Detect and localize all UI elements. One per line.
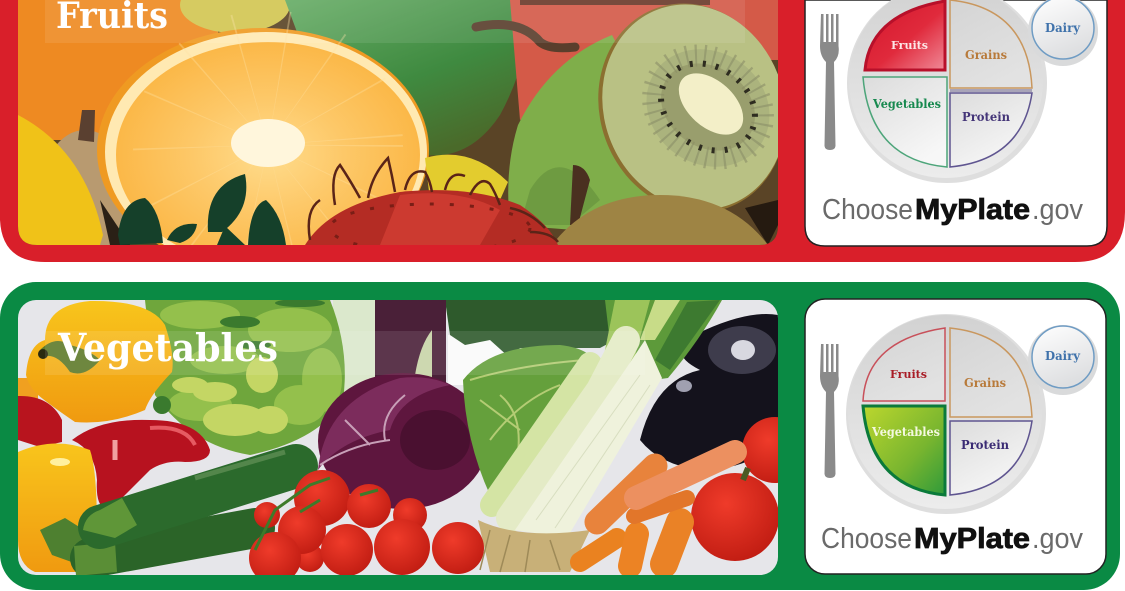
kiwi slice (598, 4, 778, 209)
eggplant (640, 314, 778, 470)
vegetables label: Vegetables (872, 97, 941, 111)
zucchini lower (40, 518, 255, 576)
tomato calyx (743, 468, 748, 480)
fruits title band (45, 0, 745, 43)
MyPlate graphic: vegetables highlighted (820, 314, 1098, 514)
leek roots (478, 520, 590, 572)
plate (847, 0, 1047, 183)
brown kiwi (552, 195, 768, 245)
logo text: .gov (1032, 523, 1083, 555)
logo text: Choose (821, 523, 912, 555)
grains label: Grains (965, 48, 1007, 62)
white plate card (805, 299, 1106, 574)
dairy cup: Dairy (1045, 349, 1081, 363)
red pepper (72, 420, 210, 510)
plate (846, 314, 1046, 514)
red small pepper (18, 396, 62, 447)
panel: vegetables (0, 282, 1120, 590)
red panel frame (0, 0, 1125, 262)
segment: grains (950, 328, 1032, 417)
segment: protein (950, 93, 1032, 167)
grains label: Grains (964, 376, 1006, 390)
orange slice (97, 28, 429, 272)
logo text: MyPlate (915, 194, 1030, 226)
icon: fork (820, 14, 839, 150)
tomatoes (249, 417, 778, 575)
logo text (822, 194, 1083, 226)
segment: fruits (865, 1, 945, 70)
leeks (492, 300, 722, 538)
green pear (508, 35, 650, 232)
zucchini upper (83, 452, 296, 538)
savoy cabbage (463, 345, 592, 495)
MyPlate graphic: fruits highlighted (820, 0, 1098, 183)
logo text: .gov (1032, 194, 1083, 226)
dairy cup: Dairy (1045, 21, 1081, 35)
segment: protein (950, 421, 1032, 495)
logo text: Choose (822, 194, 913, 226)
dairy cup (1028, 325, 1098, 395)
fruits label: Fruits (891, 38, 928, 52)
rambutan (305, 158, 558, 252)
carrots (580, 452, 735, 566)
vegetable photograph (18, 299, 808, 584)
fruit photograph (18, 0, 778, 245)
broccoli backdrop (446, 300, 609, 353)
band between grains and protein (950, 89, 1032, 92)
yellow pepper bottom (18, 443, 97, 572)
segment: grains (950, 0, 1032, 88)
segment: vegetables (863, 406, 945, 495)
protein label: Protein (962, 110, 1010, 124)
tomato stems (255, 478, 378, 550)
heading: Vegetables: Vegetables (57, 325, 278, 370)
white plate card (805, 0, 1107, 246)
yellow pepper top (26, 301, 173, 422)
fruits label: Fruits (890, 367, 927, 381)
vegetables label: Vegetables (871, 425, 940, 439)
logo text: MyPlate (914, 523, 1030, 555)
panel: fruits (0, 0, 1125, 272)
orange small pepper (18, 378, 38, 399)
red cabbage (318, 373, 488, 509)
radicchio leaf and pale stalk (370, 300, 446, 385)
segment: vegetables (863, 77, 947, 167)
logo text (821, 523, 1083, 555)
icon: fork (820, 344, 839, 478)
leaves (118, 174, 286, 245)
lettuce (145, 299, 345, 455)
protein label: Protein (961, 438, 1009, 452)
vegetables title band (45, 331, 645, 375)
segment: fruits (863, 328, 945, 401)
green panel frame (0, 282, 1120, 590)
dairy cup (1028, 0, 1098, 66)
